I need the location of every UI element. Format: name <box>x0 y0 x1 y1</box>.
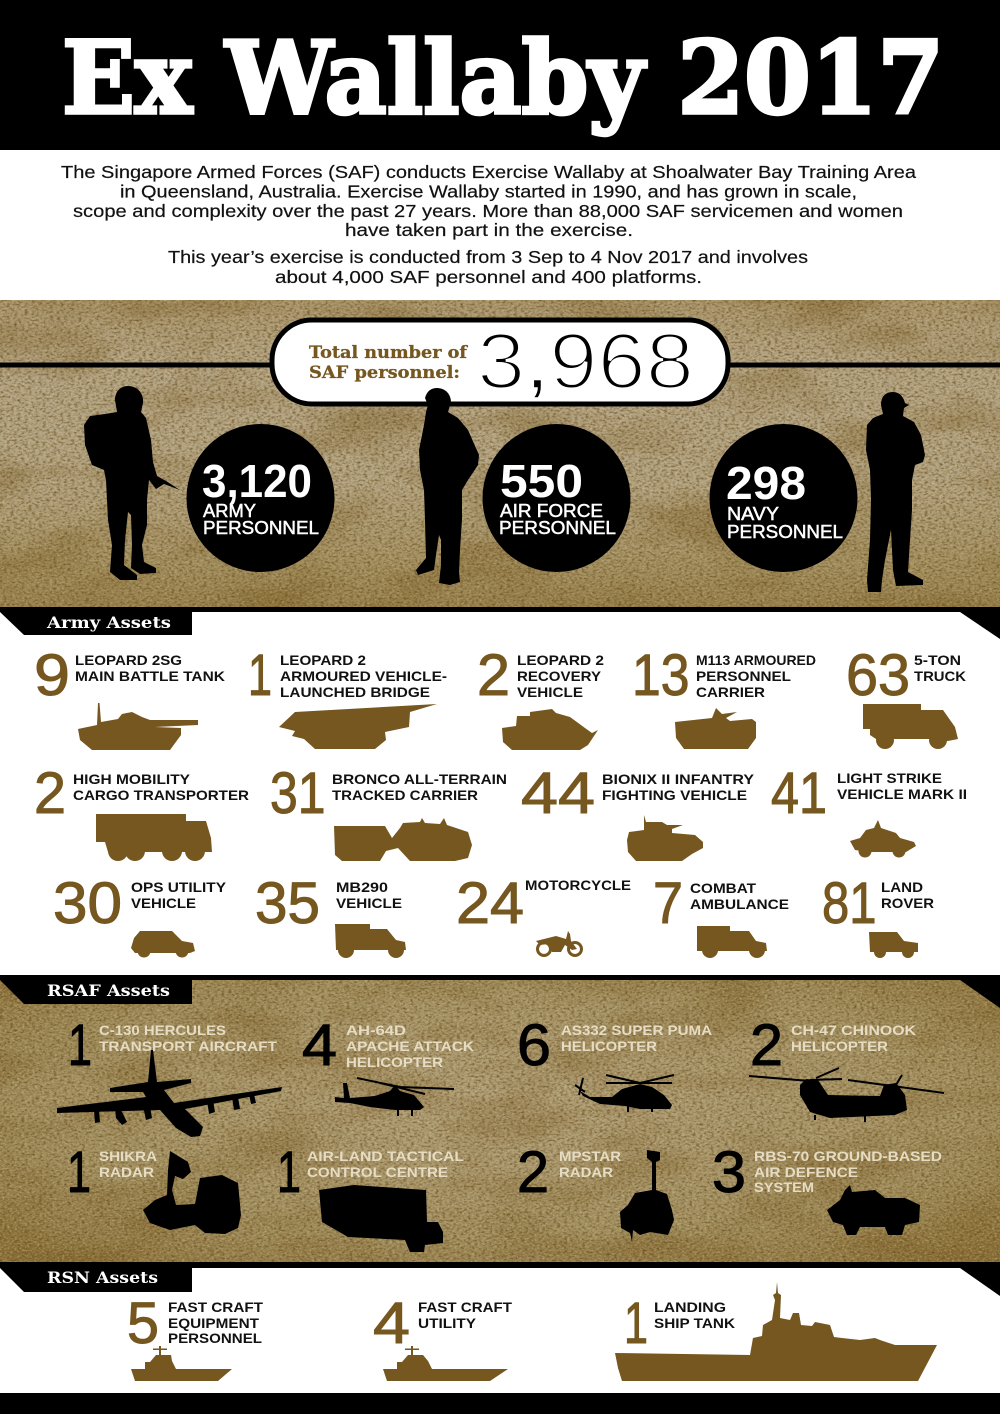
asset: motorcycle: 24 <box>456 871 524 936</box>
asset: AS332 Super Puma: 6 <box>517 1013 551 1078</box>
asset: Land Rover: ROVER <box>881 895 934 911</box>
asset: fast craft utility <box>373 1291 512 1381</box>
asset: MPSTAR radar: RADAR <box>559 1164 613 1180</box>
asset: high mobility cargo transporter: 2 <box>34 761 66 826</box>
asset: Shikra radar: RADAR <box>99 1164 154 1180</box>
asset: Leopard 2 recovery vehicle <box>477 643 604 750</box>
section heading: RSN assets <box>0 1268 192 1292</box>
asset: Bronco: TRACKED CARRIER <box>332 787 478 803</box>
asset: Leopard 2 AVLB: ARMOURED VEHICLE- <box>280 668 447 684</box>
asset: MPSTAR radar: 2 <box>517 1140 549 1205</box>
asset: fast craft equipment personnel: PERSONNEL <box>168 1330 262 1346</box>
intro text: The Singapore Armed Forces (SAF) conducts Exercise Wallaby at Shoalwater Bay Training Area <box>61 162 916 182</box>
asset: OPS utility vehicle: VEHICLE <box>131 895 196 911</box>
panel: army assets <box>0 607 1000 958</box>
navy personnel stat: PERSONNEL <box>727 522 843 542</box>
asset: M113: M113 ARMOURED <box>696 652 816 668</box>
asset: fast craft equipment personnel: 5 <box>127 1291 159 1356</box>
total personnel pill: SAF personnel: <box>309 363 460 383</box>
air force personnel stat <box>482 424 630 572</box>
asset: motorcycle <box>456 871 631 956</box>
asset: Leopard 2 AVLB: 1 <box>248 643 272 708</box>
asset: Land Rover: 81 <box>822 871 876 936</box>
asset: 5-ton truck: 5-TON <box>914 652 961 668</box>
asset: air-land tactical control centre: AIR-LAND TACTICAL <box>307 1148 464 1164</box>
icon: air force personnel silhouette <box>416 388 479 585</box>
asset: landing ship tank <box>615 1282 937 1381</box>
asset: RBS-70 <box>712 1140 942 1235</box>
asset: AS332 Super Puma: AS332 SUPER PUMA <box>561 1022 712 1038</box>
asset: MB290: 35 <box>255 871 320 936</box>
intro text: in Queensland, Australia. Exercise Wallaby started in 1990, and has grown in scale, <box>120 182 857 202</box>
section heading: RSN assets: RSN Assets <box>47 1268 158 1287</box>
panel: RSN assets <box>0 1262 1000 1381</box>
asset: MB290 <box>255 871 406 958</box>
asset: AH-64D Apache: AH-64D <box>346 1022 406 1038</box>
asset: MPSTAR radar <box>517 1140 674 1242</box>
section heading: army assets <box>0 612 192 635</box>
asset: AH-64D Apache <box>302 1013 474 1116</box>
asset: Leopard 2SG: 9 <box>34 643 70 708</box>
asset: landing ship tank: LANDING <box>654 1299 726 1315</box>
asset: Shikra radar: 1 <box>67 1140 91 1205</box>
asset: Light Strike Vehicle: LIGHT STRIKE <box>837 770 942 786</box>
asset: Leopard 2 AVLB: LEOPARD 2 <box>280 652 366 668</box>
asset: Bionix II: FIGHTING VEHICLE <box>602 787 747 803</box>
asset: landing ship tank: SHIP TANK <box>654 1315 735 1331</box>
asset: CH-47 Chinook <box>749 1013 944 1122</box>
asset: combat ambulance: 7 <box>653 871 683 936</box>
asset: Leopard 2SG <box>34 643 225 750</box>
asset: air-land tactical control centre: 1 <box>277 1140 301 1205</box>
asset: AS332 Super Puma: HELICOPTER <box>561 1038 657 1054</box>
intro text <box>61 162 916 287</box>
air force personnel stat: PERSONNEL <box>499 518 616 538</box>
asset: fast craft equipment personnel: FAST CRAFT <box>168 1299 263 1315</box>
asset: RBS-70: 3 <box>712 1140 746 1205</box>
asset: MB290: VEHICLE <box>336 895 402 911</box>
asset: C-130 Hercules: C-130 HERCULES <box>99 1022 226 1038</box>
asset: high mobility cargo transporter <box>34 761 249 861</box>
asset: RBS-70: RBS-70 GROUND-BASED <box>754 1148 942 1164</box>
asset: combat ambulance: COMBAT <box>690 880 756 896</box>
asset: 5-ton truck: 63 <box>846 643 910 708</box>
asset: fast craft utility: FAST CRAFT <box>418 1299 512 1315</box>
title banner: Ex Wallaby 2017 <box>62 19 944 137</box>
asset: Bionix II: 44 <box>521 761 595 826</box>
section heading: RSAF assets <box>0 980 192 1004</box>
asset: Land Rover <box>822 871 934 958</box>
asset: Land Rover: LAND <box>881 879 923 895</box>
asset: CH-47 Chinook: CH-47 CHINOOK <box>791 1022 916 1038</box>
asset: fast craft equipment personnel: EQUIPMENT <box>168 1315 259 1331</box>
total personnel pill: 3,968 <box>477 316 694 405</box>
asset: high mobility cargo transporter: CARGO TRANSPORTER <box>73 787 249 803</box>
total personnel pill <box>272 316 728 405</box>
asset: air-land tactical control centre: CONTROL CENTRE <box>307 1164 448 1180</box>
intro text: about 4,000 SAF personnel and 400 platforms. <box>275 267 702 287</box>
intro text: This year’s exercise is conducted from 3 Sep to 4 Nov 2017 and involves <box>168 247 808 267</box>
asset: Leopard 2SG: MAIN BATTLE TANK <box>75 668 225 684</box>
army personnel stat: 3,120 <box>202 455 312 507</box>
air force personnel stat: 550 <box>500 455 583 507</box>
asset: fast craft utility: UTILITY <box>418 1315 477 1331</box>
army personnel stat: ARMY <box>203 501 256 521</box>
asset: MPSTAR radar: MPSTAR <box>559 1148 621 1164</box>
asset: AH-64D Apache: 4 <box>302 1013 337 1078</box>
asset: Leopard 2 recovery vehicle: RECOVERY <box>517 668 602 684</box>
asset: high mobility cargo transporter: HIGH MOBILITY <box>73 771 191 787</box>
section heading: RSAF assets: RSAF Assets <box>47 981 170 1000</box>
asset: 5-ton truck <box>846 643 966 749</box>
asset: Bionix II: BIONIX II INFANTRY <box>602 771 755 787</box>
navy personnel stat <box>710 424 858 572</box>
asset: landing ship tank: 1 <box>624 1291 648 1356</box>
army personnel stat <box>186 424 334 572</box>
icon: navy personnel silhouette <box>866 392 925 592</box>
asset: Shikra radar <box>67 1140 241 1234</box>
asset: OPS utility vehicle: OPS UTILITY <box>131 879 227 895</box>
asset: AH-64D Apache: HELICOPTER <box>346 1054 443 1070</box>
army personnel stat: PERSONNEL <box>203 518 319 538</box>
asset: C-130 Hercules: 1 <box>68 1013 92 1078</box>
asset: RBS-70: SYSTEM <box>754 1179 814 1195</box>
asset: Shikra radar: SHIKRA <box>99 1148 157 1164</box>
asset: MB290: MB290 <box>336 879 388 895</box>
footer band <box>0 1393 1000 1414</box>
asset: CH-47 Chinook: 2 <box>750 1013 783 1078</box>
asset: M113: CARRIER <box>696 684 765 700</box>
asset: Leopard 2SG: LEOPARD 2SG <box>75 652 182 668</box>
asset: M113 <box>632 643 816 749</box>
asset: combat ambulance: AMBULANCE <box>690 896 789 912</box>
air force personnel stat: AIR FORCE <box>500 501 603 521</box>
intro text: have taken part in the exercise. <box>345 220 633 240</box>
asset: Bronco <box>270 761 507 861</box>
asset: Light Strike Vehicle: 41 <box>771 761 827 826</box>
asset: AS332 Super Puma <box>517 1013 712 1112</box>
asset: combat ambulance <box>653 871 789 958</box>
asset: Light Strike Vehicle <box>771 761 967 858</box>
asset: Leopard 2 recovery vehicle: LEOPARD 2 <box>517 652 604 668</box>
asset: fast craft equipment personnel <box>127 1291 263 1381</box>
navy personnel stat: NAVY <box>727 504 779 524</box>
asset: AH-64D Apache: APACHE ATTACK <box>346 1038 474 1054</box>
asset: M113: 13 <box>632 643 690 708</box>
asset: Bronco: BRONCO ALL-TERRAIN <box>332 771 507 787</box>
panel: personnel <box>0 300 1000 607</box>
asset: Leopard 2 AVLB: LAUNCHED BRIDGE <box>280 684 430 700</box>
asset: Bronco: 31 <box>270 761 326 826</box>
intro text: scope and complexity over the past 27 years. More than 88,000 SAF servicemen and women <box>73 201 903 221</box>
asset: Leopard 2 AVLB <box>248 643 447 749</box>
asset: Bionix II <box>521 761 755 861</box>
asset: air-land tactical control centre <box>277 1140 464 1252</box>
asset: M113: PERSONNEL <box>696 668 791 684</box>
asset: OPS utility vehicle <box>53 871 227 958</box>
asset: RBS-70: AIR DEFENCE <box>754 1164 858 1180</box>
asset: Leopard 2 recovery vehicle: VEHICLE <box>517 684 583 700</box>
section heading: army assets: Army Assets <box>46 613 171 632</box>
asset: 5-ton truck: TRUCK <box>914 668 966 684</box>
panel: RSAF assets <box>0 975 1000 1262</box>
asset: C-130 Hercules <box>57 1013 282 1137</box>
asset: motorcycle: MOTORCYCLE <box>525 877 631 893</box>
navy personnel stat: 298 <box>726 457 806 509</box>
total personnel pill: Total number of <box>309 343 469 363</box>
asset: C-130 Hercules: TRANSPORT AIRCRAFT <box>99 1038 277 1054</box>
icon: army soldier silhouette <box>84 386 180 580</box>
asset: CH-47 Chinook: HELICOPTER <box>791 1038 888 1054</box>
asset: Leopard 2 recovery vehicle: 2 <box>477 643 510 708</box>
asset: fast craft utility: 4 <box>373 1291 410 1356</box>
asset: OPS utility vehicle: 30 <box>53 871 122 936</box>
asset: Light Strike Vehicle: VEHICLE MARK II <box>837 786 967 802</box>
